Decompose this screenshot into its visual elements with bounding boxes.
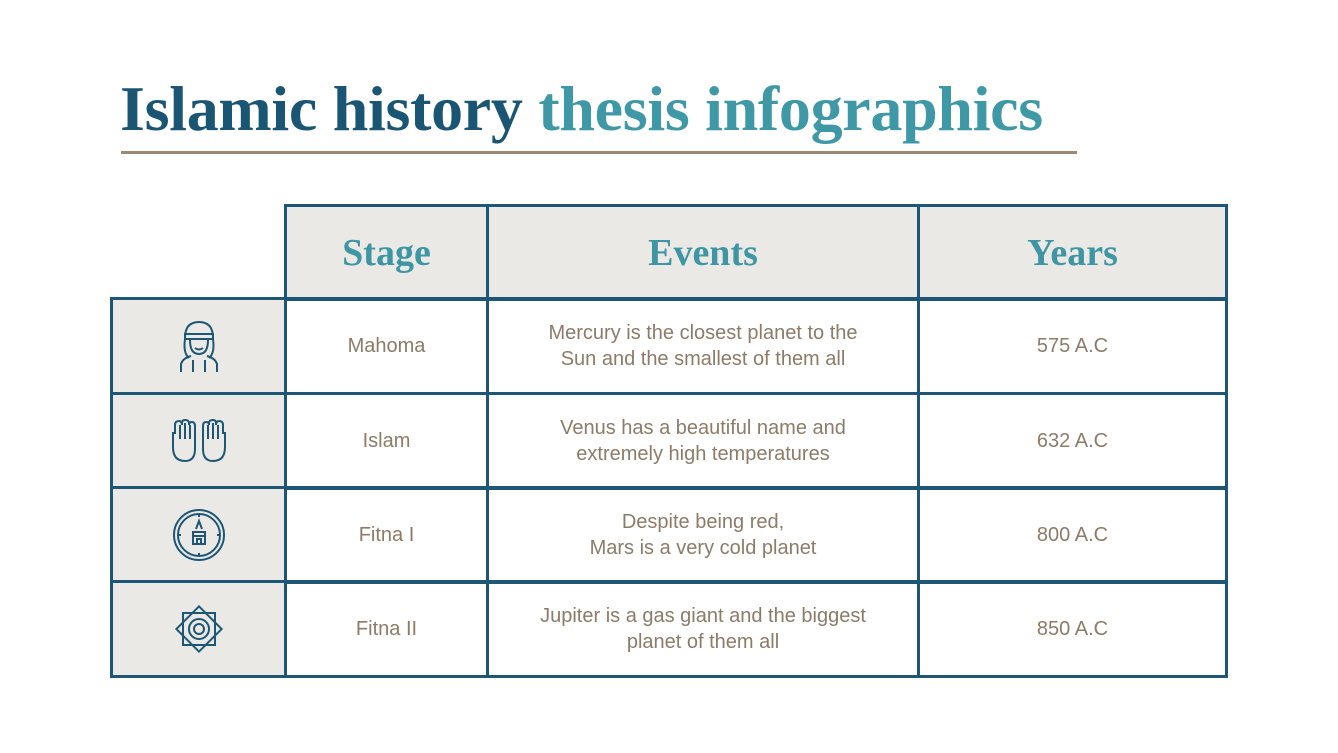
year 4: 850 A.C <box>1037 618 1108 640</box>
event 3 <box>486 486 920 584</box>
stage: Fitna II: Fitna II <box>356 618 417 640</box>
title: Islamic history thesis infographics <box>120 73 1043 144</box>
event 4 <box>486 580 920 678</box>
event 2: Venus has a beautiful name and <box>560 417 846 439</box>
event 3: Despite being red, <box>622 511 784 533</box>
year 2: 632 A.C <box>1037 430 1108 452</box>
stage: Islam <box>284 392 489 490</box>
header: Years <box>917 204 1228 301</box>
stage: Mahoma <box>284 297 489 395</box>
year 1: 575 A.C <box>1037 335 1108 357</box>
event 3: Mars is a very cold planet <box>590 537 816 559</box>
year 1 <box>917 297 1228 395</box>
event 4: Jupiter is a gas giant and the biggest <box>540 605 866 627</box>
stage: Fitna I <box>284 486 489 584</box>
stage: Fitna I: Fitna I <box>359 524 414 546</box>
header: Stage <box>284 204 489 301</box>
stage: Mahoma: Mahoma <box>348 335 425 357</box>
event 2: extremely high temperatures <box>576 443 830 465</box>
stage: Islam: Islam <box>363 430 410 452</box>
header: Events <box>486 204 920 301</box>
icon cell: person <box>110 297 287 395</box>
year 2 <box>917 392 1228 490</box>
event 1: Sun and the smallest of them all <box>561 348 845 370</box>
icon cell: compass <box>110 486 287 584</box>
stage: Fitna II <box>284 580 489 678</box>
header: Events: Events <box>648 232 758 274</box>
event 4: planet of them all <box>627 631 779 653</box>
year 4 <box>917 580 1228 678</box>
event 1: Mercury is the closest planet to the <box>548 322 858 344</box>
header: Years: Years <box>1027 232 1118 274</box>
icon cell: star <box>110 580 287 678</box>
year 3 <box>917 486 1228 584</box>
year 3: 800 A.C <box>1037 524 1108 546</box>
event 2 <box>486 392 920 490</box>
icon cell: hands <box>110 392 287 490</box>
event 1 <box>486 297 920 395</box>
header: Stage: Stage <box>342 232 431 274</box>
